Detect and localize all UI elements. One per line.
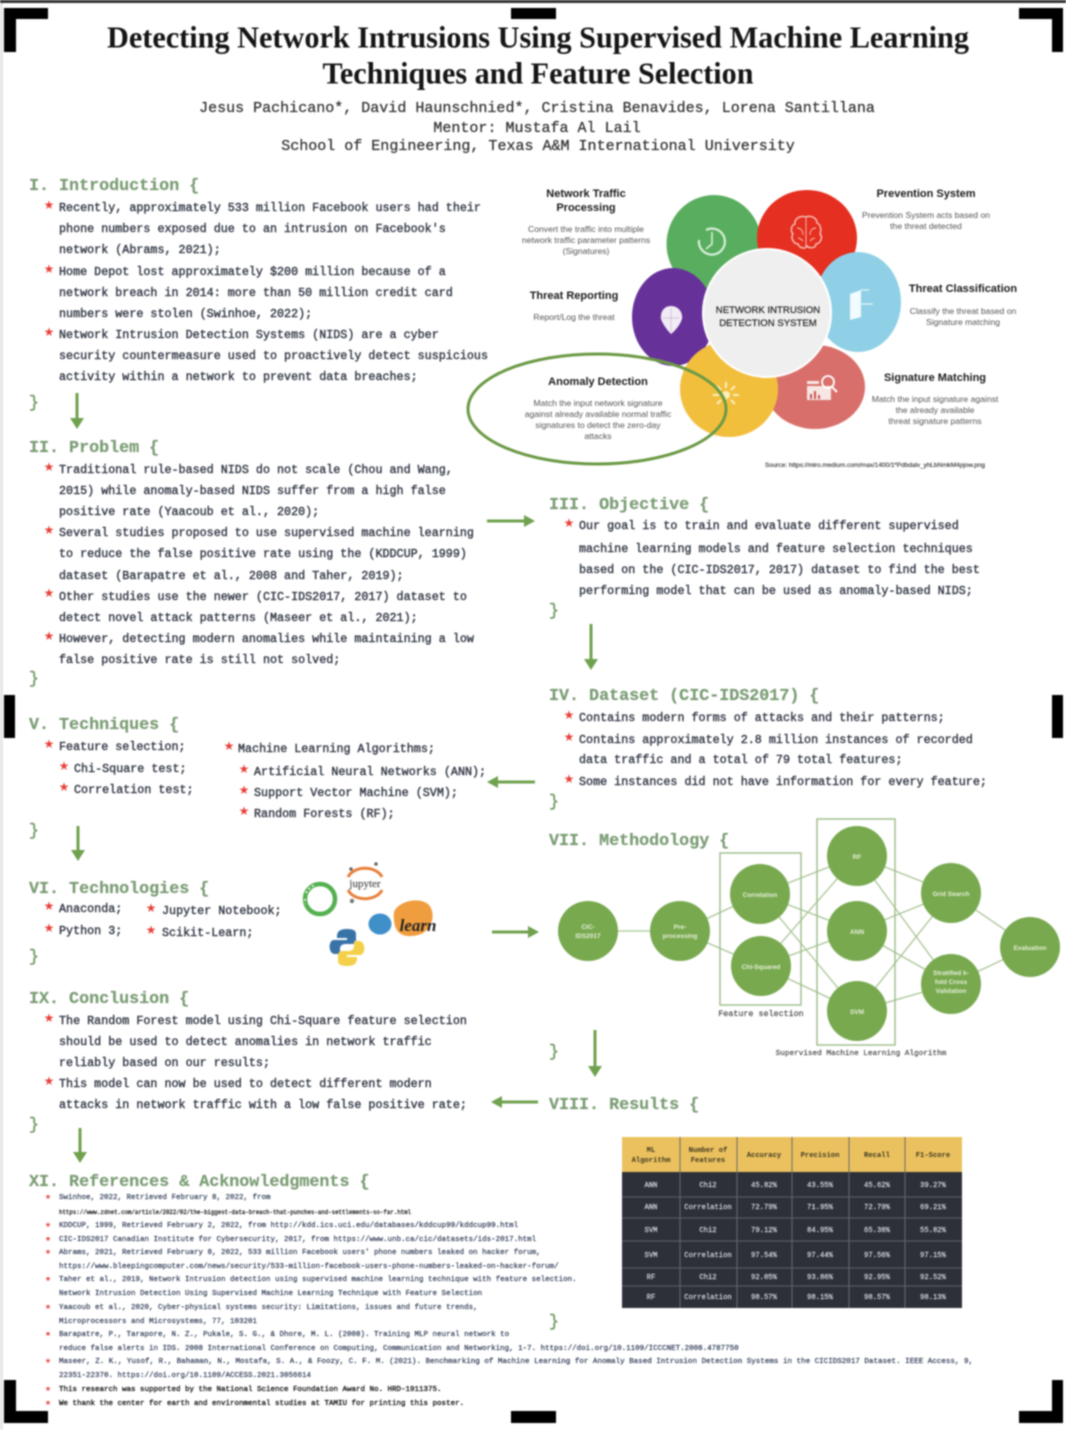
panel: conclusion: reliably based on our results; xyxy=(59,1056,270,1070)
panel: objective: } xyxy=(549,602,559,621)
table rows: 98.57% xyxy=(864,1294,891,1302)
panel: references and acknowledgments: Yaacoub et al., 2020, Cyber-physical systems security: Limitations, issues and future trends, xyxy=(59,1304,478,1312)
table header: Number of xyxy=(689,1147,727,1155)
node: grid search xyxy=(921,863,981,923)
node: correlation xyxy=(730,864,790,924)
table rows: RF xyxy=(647,1274,655,1282)
panel: techniques: } xyxy=(29,822,39,841)
icon: scikit-learn logo xyxy=(368,900,436,936)
node: SVM: SVM xyxy=(850,1009,864,1016)
panel: technologies: Jupyter Notebook; xyxy=(162,904,282,918)
table rows: 93.86% xyxy=(807,1274,834,1282)
panel: introduction: network (Abrams, 2021); xyxy=(59,243,221,257)
title xyxy=(107,20,969,90)
label: threat classification: Signature matching xyxy=(926,317,1000,327)
node: correlation: Correlation xyxy=(743,892,777,899)
table rows: SVM xyxy=(645,1227,657,1235)
table rows: 43.55% xyxy=(807,1182,834,1190)
panel: references and acknowledgments: reduce false alerts in IDS. 2008 International Conference on Computing, Communication and Networking, 1-7. https://doi.org/10.1109/ICCCNET.2008.4787750 xyxy=(59,1345,739,1353)
authors and affiliation: Mentor: Mustafa Al Lail xyxy=(433,119,641,137)
panel: conclusion: should be used to detect anomalies in network traffic xyxy=(59,1035,432,1049)
panel: references and acknowledgments: Microprocessors and Microsystems, 77, 103201 xyxy=(59,1318,258,1326)
panel: introduction: network breach in 2014: more than 50 million credit card xyxy=(59,286,453,300)
label: prevention system xyxy=(862,188,990,231)
panel: introduction xyxy=(29,177,488,413)
table rows: 97.15% xyxy=(920,1252,947,1260)
panel: references and acknowledgments: CIC-IDS2017 Canadian Institute for Cybersecurity, 2017, from https://www.unb.ca/cic/datasets/ids-2017.html xyxy=(59,1236,537,1244)
label: prevention system: Prevention System xyxy=(876,188,976,200)
panel: references and acknowledgments: ★ xyxy=(45,1248,51,1256)
label: anomaly detection: signatures to detect the zero-day xyxy=(535,420,661,430)
table rows: 92.95% xyxy=(864,1274,891,1282)
panel: references and acknowledgments: Swinhoe, 2022, Retrieved February 8, 2022, from xyxy=(59,1194,271,1202)
panel: technologies: ★ xyxy=(44,921,54,935)
label: signature matching: the already available xyxy=(896,405,975,415)
panel: problem xyxy=(29,439,474,689)
table header: Precision xyxy=(801,1152,839,1160)
node: chi-squared xyxy=(731,936,791,996)
panel: techniques: ★ xyxy=(44,737,54,751)
label: anomaly detection: against already available normal traffic xyxy=(525,409,672,419)
panel: introduction: I. Introduction { xyxy=(29,177,199,196)
panel: objective: based on the (CIC-IDS2017, 2017) dataset to find the best xyxy=(579,563,980,577)
connectors xyxy=(588,856,1030,1011)
group: feature selection: Feature selection xyxy=(718,1009,804,1019)
label: anomaly detection: attacks xyxy=(584,431,612,441)
label: signature matching: Match the input signature against xyxy=(872,394,999,404)
panel: references and acknowledgments: Network Intrusion Detection Using Supervised Machine Learning Technique with Feature Selection xyxy=(59,1290,482,1298)
arrow: technologies to methodology xyxy=(492,926,539,938)
table rows: Correlation xyxy=(684,1294,732,1302)
panel: problem: } xyxy=(29,670,39,689)
panel: technologies: ★ xyxy=(146,901,156,915)
panel: conclusion: attacks in network traffic with a low false positive rate; xyxy=(59,1098,467,1112)
node: ANN xyxy=(827,901,887,961)
panel: problem: dataset (Barapatre et al., 2008 and Taher, 2019); xyxy=(59,569,404,583)
panel: dataset: Contains approximately 2.8 million instances of recorded xyxy=(579,733,973,747)
panel: references and acknowledgments: We thank the center for earth and environmental studies at TAMIU for printing this poster. xyxy=(59,1400,464,1408)
panel: dataset: ★ xyxy=(564,708,574,722)
panel: objective xyxy=(549,496,980,621)
panel: techniques: Support Vector Machine (SVM); xyxy=(254,786,458,800)
panel: techniques: Chi-Square test; xyxy=(74,762,187,776)
panel: problem: ★ xyxy=(44,586,54,600)
label: prevention system: Prevention System acts based on xyxy=(862,210,990,220)
table header: Algorithm xyxy=(632,1157,671,1165)
table rows: 79.12% xyxy=(751,1227,778,1235)
heading: results: } xyxy=(549,1313,559,1332)
table rows: ANN xyxy=(645,1204,657,1212)
label: network traffic processing xyxy=(522,188,650,256)
icon: jupyter logo xyxy=(348,862,382,903)
table rows: 39.27% xyxy=(920,1182,947,1190)
table rows: ANN xyxy=(645,1182,657,1190)
panel: introduction: numbers were stolen (Swinhoe, 2022); xyxy=(59,307,312,321)
panel: technologies: Python 3; xyxy=(59,924,122,938)
label: threat classification xyxy=(909,283,1017,327)
panel: introduction: } xyxy=(29,394,39,413)
node: CIC-IDS2017: CIC- xyxy=(581,924,595,931)
panel: dataset: Some instances did not have information for every feature; xyxy=(579,775,987,789)
panel: technologies: Scikit-Learn; xyxy=(162,926,253,940)
petal: prevention system xyxy=(757,190,857,286)
authors and affiliation xyxy=(199,99,875,155)
panel: methodology xyxy=(549,832,729,1062)
panel: technologies: Anaconda; xyxy=(59,902,122,916)
panel: techniques: V. Techniques { xyxy=(29,716,179,735)
group: supervised algorithms xyxy=(776,819,947,1058)
panel: dataset: ★ xyxy=(564,730,574,744)
panel: techniques: ★ xyxy=(239,762,249,776)
panel: problem: detect novel attack patterns (Maseer et al., 2021); xyxy=(59,611,418,625)
panel: objective: performing model that can be used as anomaly-based NIDS; xyxy=(579,584,973,598)
table rows: 97.54% xyxy=(751,1252,778,1260)
panel: techniques: ★ xyxy=(239,804,249,818)
panel: references and acknowledgments: ★ xyxy=(45,1275,51,1283)
node: evaluation: Evaluation xyxy=(1014,945,1046,952)
petal: threat classification xyxy=(815,252,901,352)
panel: conclusion: ★ xyxy=(44,1011,54,1025)
panel: references and acknowledgments: KDDCUP, 1999, Retrieved February 2, 2022, from http://kdd.ics.uci.edu/databases/kddcup99/kddcup99.html xyxy=(59,1222,519,1230)
table header: Recall xyxy=(864,1152,891,1160)
petal: threat reporting xyxy=(632,268,714,366)
label: threat reporting xyxy=(530,290,618,322)
panel: references and acknowledgments: Barapatre, P., Tarapore, N. Z., Pukale, S. G., & Dhore, M. L. (2008). Training MLP neural network to xyxy=(59,1331,510,1339)
panel: technologies: } xyxy=(29,948,39,967)
group: supervised algorithms: Supervised Machine Learning Algorithm xyxy=(776,1050,947,1058)
panel: references and acknowledgments: ★ xyxy=(45,1221,51,1229)
node: RF xyxy=(827,826,887,886)
center circle: NETWORK INTRUSION xyxy=(716,305,820,316)
panel: references and acknowledgments: Abrams, 2021, Retrieved February 8, 2022, 533 million Facebook users' phone numbers leaked on hacker forum, xyxy=(59,1249,541,1257)
network intrusion detection system flower diagram xyxy=(468,188,1017,469)
table rows: 98.13% xyxy=(920,1294,947,1302)
arrow: results to conclusion xyxy=(491,1096,538,1108)
table header xyxy=(632,1147,950,1165)
label: network traffic processing: Convert the traffic into multiple xyxy=(528,224,644,234)
panel: references and acknowledgments: ★ xyxy=(45,1235,51,1243)
table header: F1-Score xyxy=(916,1152,950,1160)
arrow: techniques to technologies xyxy=(71,826,85,861)
table rows: 97.44% xyxy=(807,1252,834,1260)
node: pre-processing: Pre- xyxy=(674,924,686,931)
panel: dataset: IV. Dataset (CIC-IDS2017) { xyxy=(549,687,819,706)
arrow: dataset to techniques xyxy=(487,776,535,788)
panel: techniques: ★ xyxy=(59,759,69,773)
table rows xyxy=(645,1182,947,1302)
icon: jupyter logo: jupyter xyxy=(348,878,381,890)
panel: dataset: ★ xyxy=(564,772,574,786)
panel: problem: ★ xyxy=(44,523,54,537)
table rows: Chi2 xyxy=(699,1227,717,1235)
label: network traffic processing: Network Traffic xyxy=(546,188,626,200)
panel: techniques: Random Forests (RF); xyxy=(254,807,395,821)
icon: python logo xyxy=(330,929,364,966)
table header: Accuracy xyxy=(747,1152,782,1160)
arrow: introduction to problem xyxy=(70,393,84,429)
heading: results xyxy=(549,1096,699,1332)
panel: problem: to reduce the false positive rate using the (KDDCUP, 1999) xyxy=(59,547,467,561)
node: stratified k-fold cross validation: Validation xyxy=(936,988,966,995)
table rows: Correlation xyxy=(684,1252,732,1260)
panel: techniques: Machine Learning Algorithms; xyxy=(238,742,435,756)
label: threat reporting: Threat Reporting xyxy=(530,290,618,302)
panel: problem: However, detecting modern anomalies while maintaining a low xyxy=(59,632,474,646)
table rows: Chi2 xyxy=(699,1274,717,1282)
panel: techniques xyxy=(29,716,486,841)
panel: references and acknowledgments: ★ xyxy=(45,1357,51,1365)
table rows: 98.15% xyxy=(807,1294,834,1302)
petal: signature matching xyxy=(765,345,865,429)
panel: techniques: ★ xyxy=(239,783,249,797)
center circle xyxy=(703,249,831,377)
panel: references and acknowledgments xyxy=(29,1173,973,1408)
label: signature matching xyxy=(872,372,999,426)
panel: problem: positive rate (Yaacoub et al., 2020); xyxy=(59,505,319,519)
label: anomaly detection: Anomaly Detection xyxy=(548,376,648,388)
panel: conclusion: } xyxy=(29,1116,39,1135)
node: stratified k-fold cross validation xyxy=(921,954,981,1014)
panel: objective: III. Objective { xyxy=(549,496,709,515)
panel: dataset: Contains modern forms of attacks and their patterns; xyxy=(579,711,945,725)
table rows: 92.52% xyxy=(920,1274,947,1282)
table rows: 92.05% xyxy=(751,1274,778,1282)
panel: references and acknowledgments: ★ xyxy=(45,1330,51,1338)
authors and affiliation: Jesus Pachicano*, David Haunschnied*, Cristina Benavides, Lorena Santillana xyxy=(199,99,875,117)
panel: introduction: activity within a network to prevent data breaches; xyxy=(59,370,418,384)
panel: references and acknowledgments: https://www.zdnet.com/article/2022/02/the-biggest-data-breach-that-punches-and-settlements-so-far.html xyxy=(59,1209,411,1216)
heading: results: VIII. Results { xyxy=(549,1096,699,1115)
panel: dataset xyxy=(549,687,987,812)
results table xyxy=(622,1137,962,1308)
panel: techniques: Correlation test; xyxy=(74,783,194,797)
panel: introduction: Network Intrusion Detection Systems (NIDS) are a cyber xyxy=(59,328,439,342)
label: anomaly detection xyxy=(525,376,672,441)
label: network traffic processing: network traffic parameter patterns xyxy=(522,235,650,245)
table rows: 98.57% xyxy=(751,1294,778,1302)
node: CIC-IDS2017: IDS2017 xyxy=(575,933,601,940)
table rows: 45.62% xyxy=(864,1182,891,1190)
petal: network traffic processing xyxy=(666,195,762,293)
table rows: 45.82% xyxy=(751,1182,778,1190)
table rows: 71.95% xyxy=(807,1204,834,1212)
highlight ellipse around anomaly detection xyxy=(468,354,726,464)
table rows: 72.79% xyxy=(751,1204,778,1212)
source note: Source: https://miro.medium.com/max/1400/1*Pdbdalv_yhLbNmkM4pjow.png xyxy=(765,463,985,469)
title: Detecting Network Intrusions Using Supervised Machine Learning xyxy=(107,20,969,54)
panel: objective: ★ xyxy=(564,516,574,530)
arrow: objective to dataset xyxy=(584,624,598,670)
node: pre-processing xyxy=(650,901,710,961)
title: Techniques and Feature Selection xyxy=(322,56,754,90)
panel: technologies: ★ xyxy=(146,923,156,937)
table rows: 69.21% xyxy=(920,1204,947,1212)
panel: references and acknowledgments: ★ xyxy=(45,1385,51,1393)
table header: Features xyxy=(691,1157,725,1165)
panel: references and acknowledgments: https://www.bleepingcomputer.com/news/security/533-million-facebook-users-phone-numbers-leaked-on-hacker-forum/ xyxy=(59,1263,559,1271)
panel: problem: ★ xyxy=(44,629,54,643)
panel: introduction: ★ xyxy=(44,262,54,276)
table rows: 72.79% xyxy=(864,1204,891,1212)
table rows: Correlation xyxy=(684,1204,732,1212)
panel: problem: Other studies use the newer (CIC-IDS2017, 2017) dataset to xyxy=(59,590,467,604)
panel: problem: ★ xyxy=(44,460,54,474)
node: pre-processing: processing xyxy=(663,933,697,940)
panel: dataset: data traffic and a total of 79 total features; xyxy=(579,753,902,767)
node: ANN: ANN xyxy=(850,929,864,936)
table rows: Chi2 xyxy=(699,1182,717,1190)
table header: ML xyxy=(647,1147,655,1155)
panel: methodology: } xyxy=(549,1043,559,1062)
panel: technologies: VI. Technologies { xyxy=(29,880,209,899)
panel: conclusion: This model can now be used to detect different modern xyxy=(59,1077,432,1091)
panel: conclusion: ★ xyxy=(44,1074,54,1088)
panel: methodology: VII. Methodology { xyxy=(549,832,729,851)
panel: references and acknowledgments: Taher et al., 2019, Network Intrusion detection using supervised machine learning technique with feature selection. xyxy=(59,1276,577,1284)
node: stratified k-fold cross validation: fold Cross xyxy=(935,979,967,986)
panel: introduction: ★ xyxy=(44,198,54,212)
table rows: 55.82% xyxy=(920,1227,947,1235)
icon: scikit-learn logo: learn xyxy=(400,916,436,935)
label: anomaly detection: Match the input network signature xyxy=(534,398,663,408)
panel: problem: II. Problem { xyxy=(29,439,159,458)
center circle: DETECTION SYSTEM xyxy=(719,318,817,329)
label: signature matching: Signature Matching xyxy=(884,372,986,384)
node: evaluation xyxy=(1000,917,1060,977)
node: grid search: Grid Search xyxy=(933,891,969,898)
panel: technologies: ★ xyxy=(44,899,54,913)
authors and affiliation: School of Engineering, Texas A&M International University xyxy=(281,137,795,155)
arrow: problem to objective xyxy=(487,515,535,527)
panel: introduction: Home Depot lost approximately $200 million because of a xyxy=(59,265,446,279)
node: stratified k-fold cross validation: Stratified k- xyxy=(933,970,969,977)
methodology flowchart xyxy=(558,819,1060,1058)
label: prevention system: the threat detected xyxy=(890,221,962,231)
panel: problem: false positive rate is still not solved; xyxy=(59,653,340,667)
panel: references and acknowledgments: This research was supported by the National Science Foundation Award No. HRD-1911375. xyxy=(59,1386,442,1394)
panel: problem: Several studies proposed to use supervised machine learning xyxy=(59,526,474,540)
panel: techniques: ★ xyxy=(59,780,69,794)
panel: references and acknowledgments: Maseer, Z. K., Yusof, R., Bahaman, N., Mostafa, S. A., & Foozy, C. F. M. (2021). Benchmarking of Machine Learning for Anomaly Based Intrusion Detection Systems in the CICIDS2017 Dataset. IEEE Access, 9, xyxy=(59,1358,973,1366)
petal: anomaly detection xyxy=(680,341,778,437)
panel: references and acknowledgments: ★ xyxy=(45,1303,51,1311)
panel: techniques: Feature selection; xyxy=(59,740,186,754)
node: chi-squared: Chi-Squared xyxy=(742,964,780,971)
panel: dataset: } xyxy=(549,793,559,812)
table rows: 97.56% xyxy=(864,1252,891,1260)
panel: conclusion: The Random Forest model using Chi-Square feature selection xyxy=(59,1014,467,1028)
label: threat classification: Threat Classification xyxy=(909,283,1017,295)
label: threat reporting: Report/Log the threat xyxy=(533,312,615,322)
label: network traffic processing: Processing xyxy=(556,202,616,214)
icon: anaconda logo xyxy=(305,884,335,914)
label: signature matching: threat signature patterns xyxy=(888,416,982,426)
panel: problem: Traditional rule-based NIDS do not scale (Chou and Wang, xyxy=(59,463,453,477)
panel: introduction: security countermeasure used to proactively detect suspicious xyxy=(59,349,488,363)
table rows: SVM xyxy=(645,1252,657,1260)
panel: techniques: ★ xyxy=(224,739,234,753)
panel: introduction: Recently, approximately 533 million Facebook users had their xyxy=(59,201,481,215)
panel: references and acknowledgments: XI. References & Acknowledgments { xyxy=(29,1173,369,1192)
panel: introduction: ★ xyxy=(44,325,54,339)
panel: references and acknowledgments: ★ xyxy=(45,1193,51,1201)
panel: introduction: phone numbers exposed due to an intrusion on Facebook's xyxy=(59,222,446,236)
panel: references and acknowledgments: ★ xyxy=(45,1399,51,1407)
table rows: 65.38% xyxy=(864,1227,891,1235)
group: feature selection xyxy=(718,853,804,1019)
panel: references and acknowledgments: 22351-22370. https://doi.org/10.1109/ACCESS.2021.3056614 xyxy=(59,1372,312,1380)
panel: objective: machine learning models and feature selection techniques xyxy=(579,542,973,556)
node: SVM xyxy=(827,981,887,1041)
table rows: RF xyxy=(647,1294,655,1302)
panel: technologies xyxy=(29,880,282,967)
node: CIC-IDS2017 xyxy=(558,901,618,961)
arrow: conclusion to references xyxy=(73,1128,87,1163)
label: network traffic processing: (Signatures) xyxy=(563,246,610,256)
arrow: methodology to results xyxy=(588,1030,602,1077)
panel: techniques: Artificial Neural Networks (ANN); xyxy=(254,765,486,779)
label: threat classification: Classify the threat based on xyxy=(910,306,1016,316)
panel: conclusion: IX. Conclusion { xyxy=(29,990,189,1009)
table rows: 84.95% xyxy=(807,1227,834,1235)
panel: problem: 2015) while anomaly-based NIDS suffer from a high false xyxy=(59,484,446,498)
node: RF: RF xyxy=(853,854,861,861)
panel: objective: Our goal is to train and evaluate different supervised xyxy=(579,519,959,533)
panel: conclusion xyxy=(29,990,467,1135)
